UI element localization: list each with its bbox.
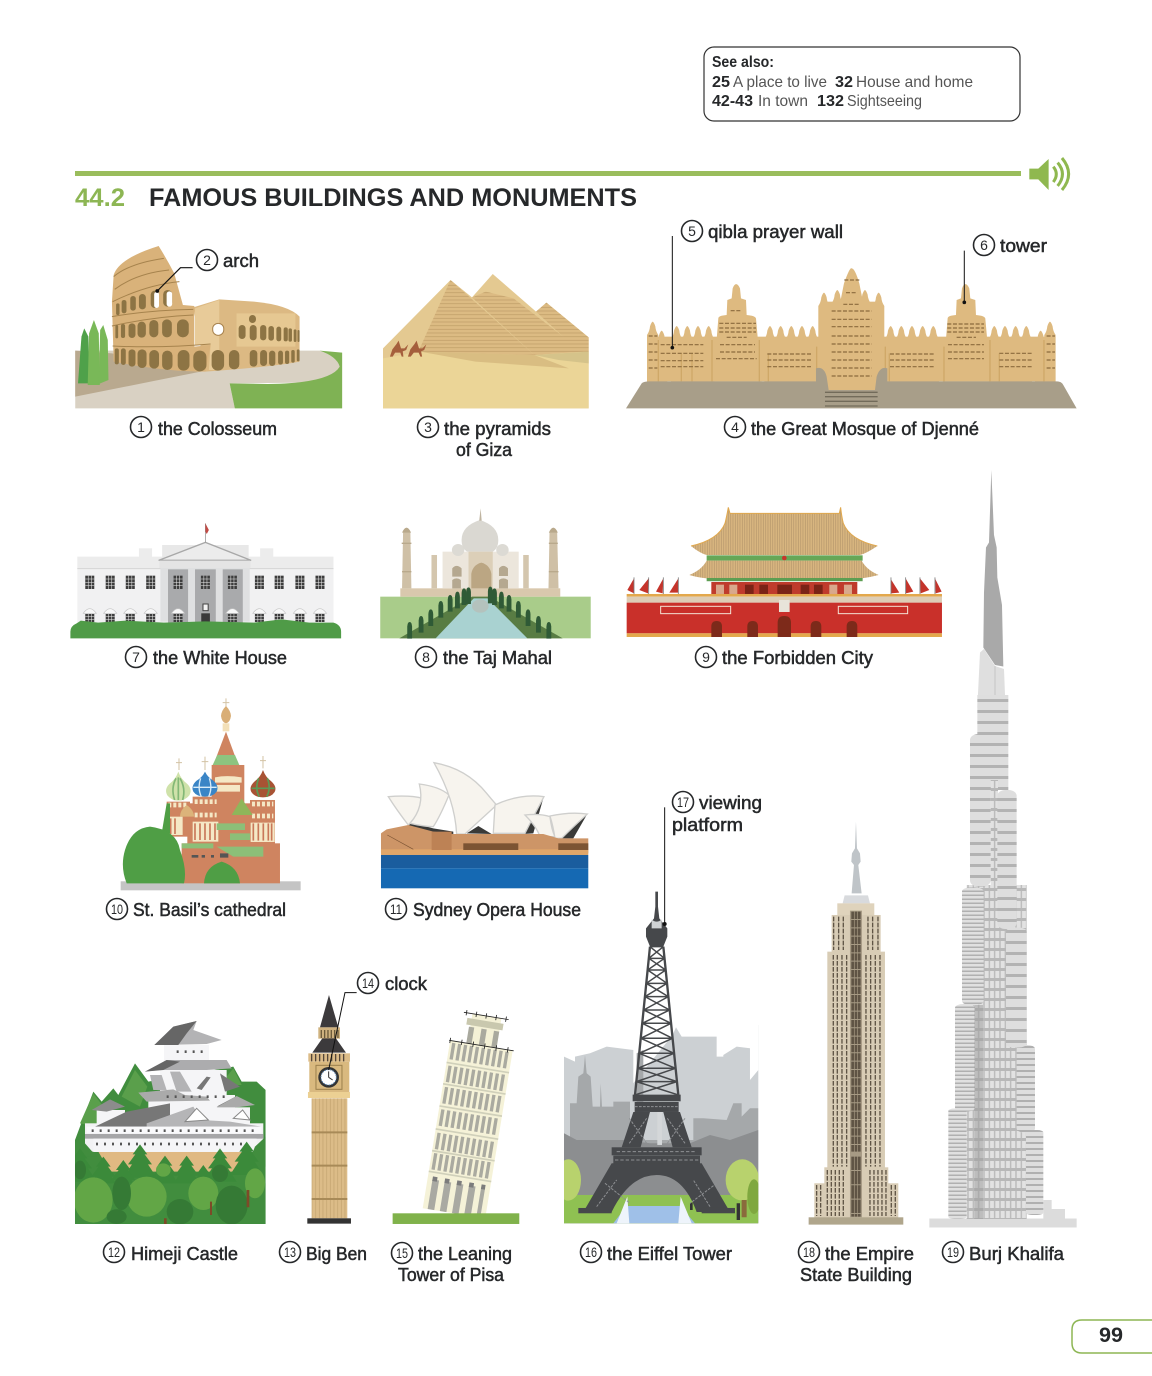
label: 7 the White House: 7 bbox=[132, 649, 140, 665]
label: 15 the Leaning Tower of Pisa: the Leaning bbox=[418, 1244, 512, 1264]
page number tab: 99 bbox=[1099, 1324, 1123, 1347]
see also box: A place to live bbox=[733, 74, 827, 91]
see also box: See also: bbox=[712, 54, 774, 71]
illustration: Taj Mahal bbox=[380, 508, 591, 639]
illustration: Forbidden City bbox=[627, 507, 942, 637]
see also box: 132 bbox=[817, 93, 844, 110]
label: 14 clock: clock bbox=[385, 974, 428, 994]
illustration: pyramids of Giza bbox=[383, 274, 589, 408]
label: 19 Burj Khalifa: 19 bbox=[947, 1244, 959, 1260]
label: 18 the Empire State Building bbox=[798, 1242, 914, 1285]
see also box: 42-43 bbox=[712, 93, 753, 110]
label: 1 the Colosseum: the Colosseum bbox=[158, 419, 277, 439]
label: 15 the Leaning Tower of Pisa bbox=[392, 1242, 512, 1285]
label: 8 the Taj Mahal: the Taj Mahal bbox=[443, 648, 552, 668]
leader: arch bbox=[157, 268, 193, 291]
label: 10 St. Basil's cathedral: St. Basil’s cathedral bbox=[133, 900, 286, 920]
illustration: Big Ben bbox=[307, 993, 357, 1224]
label: 15 the Leaning Tower of Pisa: Tower of Pisa bbox=[398, 1265, 505, 1285]
label: 17 viewing platform: platform bbox=[672, 815, 743, 835]
label: 6 tower bbox=[974, 234, 1047, 256]
label: 17 viewing platform bbox=[672, 792, 762, 835]
see also box: In town bbox=[758, 93, 808, 110]
see also box bbox=[704, 47, 1020, 121]
page number tab bbox=[1072, 1320, 1152, 1353]
label: 3 the pyramids of Giza bbox=[418, 416, 551, 460]
label: 13 Big Ben: Big Ben bbox=[306, 1244, 367, 1264]
label: 2 arch bbox=[196, 250, 259, 271]
label: 16 the Eiffel Tower: the Eiffel Tower bbox=[607, 1244, 732, 1264]
label: 12 Himeji Castle: Himeji Castle bbox=[131, 1244, 238, 1264]
leader: clock bbox=[329, 993, 357, 1070]
label: 4 the Great Mosque of Djenné: 4 bbox=[731, 419, 739, 435]
illustration: Colosseum bbox=[75, 246, 342, 408]
section heading: 44.2 bbox=[75, 184, 125, 212]
illustration: Great Mosque of Djenné bbox=[626, 236, 1077, 408]
illustration: Sydney Opera House bbox=[381, 763, 588, 888]
label: 5 qibla prayer wall: qibla prayer wall bbox=[708, 222, 843, 242]
label: 13 Big Ben bbox=[280, 1242, 367, 1264]
see also box: 32 bbox=[835, 74, 853, 91]
section heading: FAMOUS BUILDINGS AND MONUMENTS bbox=[149, 184, 637, 212]
label: 15 the Leaning Tower of Pisa: 15 bbox=[396, 1245, 408, 1261]
section rule bbox=[75, 171, 1021, 176]
leader: viewing platform bbox=[663, 807, 666, 924]
label: 3 the pyramids of Giza: of Giza bbox=[456, 440, 513, 460]
label: 14 clock: 14 bbox=[362, 975, 374, 991]
label: 14 clock bbox=[358, 972, 428, 994]
label: 4 the Great Mosque of Djenné: the Great Mosque of Djenné bbox=[751, 419, 979, 439]
illustration: St. Basil's cathedral bbox=[121, 698, 301, 890]
label: 16 the Eiffel Tower: 16 bbox=[585, 1244, 597, 1260]
illustration: White House bbox=[70, 523, 341, 638]
leader: qibla prayer wall bbox=[672, 236, 964, 348]
label: 10 St. Basil's cathedral: 10 bbox=[111, 901, 123, 917]
label: 8 the Taj Mahal: 8 bbox=[422, 649, 430, 665]
label: 9 the Forbidden City: 9 bbox=[702, 649, 710, 665]
icon: audio speaker bbox=[1029, 158, 1069, 190]
label: 9 the Forbidden City: the Forbidden City bbox=[722, 648, 873, 668]
label: 2 arch: arch bbox=[223, 251, 259, 271]
illustration: Empire State Building bbox=[809, 822, 903, 1225]
label: 11 Sydney Opera House: Sydney Opera House bbox=[413, 900, 581, 920]
label: 7 the White House: the White House bbox=[153, 648, 287, 668]
illustration: Leaning Tower of Pisa bbox=[393, 1008, 519, 1224]
illustration: Burj Khalifa bbox=[929, 470, 1077, 1228]
label: 3 the pyramids of Giza: the pyramids bbox=[444, 419, 551, 439]
illustration: Himeji Castle bbox=[63, 1021, 266, 1224]
see also box: 25 bbox=[712, 74, 730, 91]
see also box: House and home bbox=[856, 74, 973, 91]
label: 5 qibla prayer wall: 5 bbox=[688, 223, 696, 239]
label: 12 Himeji Castle: 12 bbox=[108, 1244, 120, 1260]
label: 19 Burj Khalifa bbox=[942, 1242, 1065, 1264]
label: 19 Burj Khalifa: Burj Khalifa bbox=[969, 1244, 1065, 1264]
illustration: Eiffel Tower bbox=[556, 807, 761, 1223]
label: 13 Big Ben: 13 bbox=[284, 1244, 296, 1260]
camels bbox=[390, 341, 426, 357]
label: 17 viewing platform: viewing bbox=[699, 793, 762, 813]
label: 2 arch: 2 bbox=[203, 252, 211, 268]
label: 11 Sydney Opera House: 11 bbox=[390, 901, 402, 917]
label: 6 tower: 6 bbox=[980, 237, 988, 253]
label: 3 the pyramids of Giza: 3 bbox=[424, 419, 432, 435]
leader dot: tower bbox=[962, 300, 966, 304]
label: 18 the Empire State Building: 18 bbox=[803, 1244, 815, 1260]
label: 6 tower: tower bbox=[1000, 236, 1047, 256]
label: 18 the Empire State Building: State Building bbox=[800, 1265, 912, 1285]
label: 18 the Empire State Building: the Empire bbox=[825, 1244, 914, 1264]
label: 1 the Colosseum: 1 bbox=[137, 419, 145, 435]
label: 17 viewing platform: 17 bbox=[677, 794, 689, 810]
see also box: Sightseeing bbox=[847, 93, 922, 110]
